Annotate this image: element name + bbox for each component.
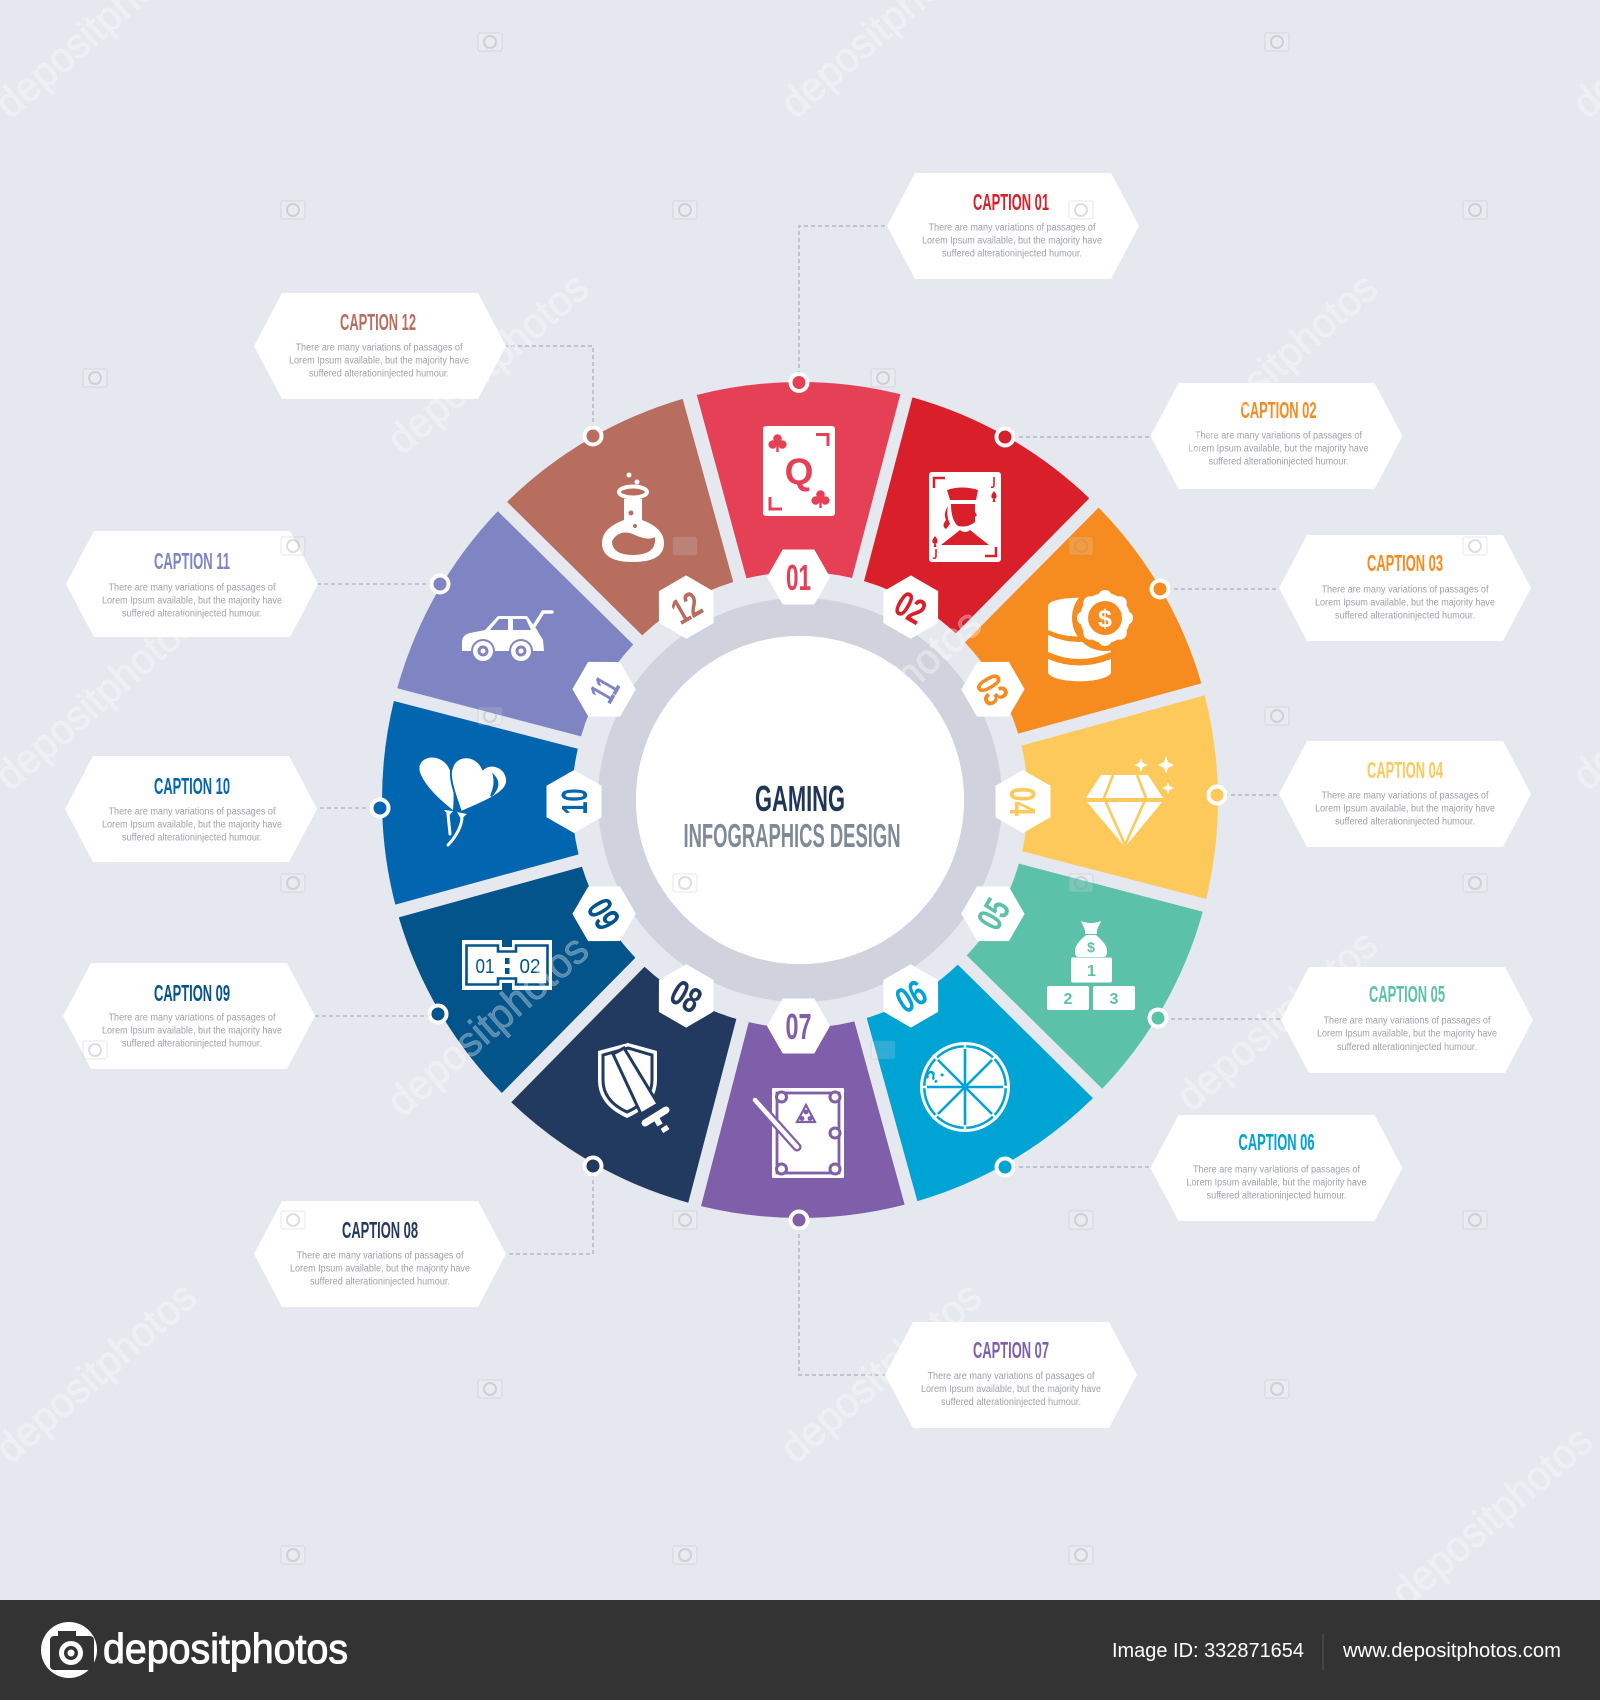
caption 10: CAPTION 10	[154, 773, 230, 799]
caption 11: suffered alterationinjected humour.	[122, 608, 262, 620]
watermark overlay: depositphotos	[771, 599, 990, 799]
caption 06: CAPTION 06	[1238, 1129, 1314, 1155]
icon: queen of clubs card: Q	[785, 451, 813, 492]
icon: wheel of fortune	[920, 1042, 1010, 1132]
caption 11: CAPTION 11	[154, 548, 230, 574]
caption 03: Lorem Ipsum available, but the majority have	[1315, 598, 1495, 608]
icon: heart balloons	[419, 757, 507, 845]
number hexagons: 03	[967, 667, 1017, 712]
footer bar	[0, 1600, 1600, 1700]
caption 07: CAPTION 07	[973, 1337, 1049, 1363]
icon: wheel of fortune: ?.	[922, 1063, 949, 1090]
caption 04: suffered alterationinjected humour.	[1335, 816, 1475, 828]
caption 10: There are many variations of passages of	[108, 806, 276, 818]
caption 12: CAPTION 12	[340, 309, 416, 335]
icon: shield and sword	[598, 1043, 668, 1131]
title: INFOGRAPHICS DESIGN	[684, 817, 900, 854]
caption 05: suffered alterationinjected humour.	[1337, 1042, 1477, 1053]
icon: pool table	[755, 1088, 844, 1178]
caption 02: Lorem Ipsum available, but the majority have	[1188, 444, 1369, 454]
caption 04: CAPTION 04	[1367, 757, 1443, 783]
caption 08: Lorem Ipsum available, but the majority have	[290, 1264, 470, 1274]
caption 04	[1279, 741, 1531, 847]
icon: depositphotos logo	[41, 1622, 97, 1678]
icon: database with dollar badge: $	[1098, 605, 1112, 633]
number hexagons: 09	[579, 891, 629, 937]
caption 11: There are many variations of passages of	[108, 582, 276, 594]
number hexagons: 05	[968, 891, 1018, 937]
caption 07: There are many variations of passages of	[928, 1371, 1095, 1382]
caption 12	[254, 293, 506, 399]
caption 08: CAPTION 08	[342, 1217, 418, 1243]
icon: money bag on podium: 1	[1087, 963, 1096, 980]
number hexagons: 12	[664, 583, 709, 632]
icon: diamond	[1086, 756, 1174, 847]
caption 06	[1150, 1115, 1402, 1221]
caption 05: Lorem Ipsum available, but the majority have	[1317, 1028, 1497, 1040]
icon: money bag on podium: 2	[1064, 991, 1073, 1008]
title: GAMING	[755, 778, 845, 819]
watermark overlay: depositphotos	[1167, 263, 1386, 463]
caption 12: suffered alterationinjected humour.	[309, 368, 449, 380]
caption 09	[63, 963, 315, 1069]
caption 04: Lorem Ipsum available, but the majority have	[1315, 804, 1495, 814]
connector dots	[372, 374, 1226, 1228]
caption 07: Lorem Ipsum available, but the majority have	[921, 1384, 1101, 1395]
caption 09: Lorem Ipsum available, but the majority have	[102, 1026, 282, 1036]
caption 08: There are many variations of passages of	[296, 1250, 464, 1262]
caption 12: There are many variations of passages of	[296, 342, 463, 354]
caption 03: CAPTION 03	[1367, 550, 1443, 576]
number hexagons: 11	[581, 670, 628, 709]
number hexagons: 04	[1002, 787, 1043, 816]
icon: scoreboard	[462, 940, 552, 990]
caption 01: There are many variations of passages of	[928, 222, 1096, 234]
caption 10	[65, 756, 317, 862]
caption 02: There are many variations of passages of	[1195, 430, 1362, 442]
caption 06: suffered alterationinjected humour.	[1206, 1190, 1346, 1202]
caption 07	[885, 1322, 1137, 1428]
icon: chemistry flask	[602, 472, 664, 562]
caption 11: Lorem Ipsum available, but the majority have	[102, 596, 282, 606]
footer logo text: depositphotos	[103, 1625, 348, 1672]
watermark overlay: depositphotos	[378, 263, 597, 463]
title	[684, 778, 900, 854]
caption 10: suffered alterationinjected humour.	[122, 832, 262, 844]
icon: scoreboard: 01	[476, 956, 494, 978]
caption 03: There are many variations of passages of	[1322, 584, 1489, 596]
caption 03	[1279, 535, 1531, 641]
number hexagons: 07	[786, 1006, 812, 1047]
caption 12: Lorem Ipsum available, but the majority have	[289, 356, 469, 366]
caption 05	[1281, 967, 1533, 1073]
icon: database with dollar badge	[1048, 585, 1138, 681]
number hexagons: 02	[888, 583, 933, 633]
number hexagons: 10	[554, 788, 595, 814]
footer image id: Image ID: 332871654	[1112, 1640, 1304, 1662]
caption 06: Lorem Ipsum available, but the majority have	[1186, 1178, 1367, 1188]
watermark overlay: depositphotos	[378, 925, 597, 1125]
number hexagons: 06	[888, 971, 934, 1021]
footer url: www.depositphotos.com	[1342, 1640, 1561, 1662]
number hexagons	[546, 550, 1050, 1054]
caption 05: There are many variations of passages of	[1324, 1016, 1491, 1026]
icon: queen of clubs card	[763, 426, 835, 516]
number hexagons: 08	[663, 971, 709, 1021]
icon: car with open trunk	[462, 612, 552, 663]
caption 09: CAPTION 09	[154, 980, 230, 1006]
caption 09: suffered alterationinjected humour.	[122, 1038, 262, 1050]
caption 03: suffered alterationinjected humour.	[1335, 610, 1475, 622]
caption 06: There are many variations of passages of	[1193, 1164, 1360, 1176]
caption 01: suffered alterationinjected humour.	[942, 248, 1082, 260]
icon: money bag on podium: 3	[1110, 991, 1119, 1008]
caption 01: Lorem Ipsum available, but the majority have	[922, 236, 1102, 246]
caption 10: Lorem Ipsum available, but the majority have	[102, 820, 282, 830]
caption 09: There are many variations of passages of	[108, 1012, 276, 1024]
caption 07: suffered alterationinjected humour.	[941, 1397, 1081, 1408]
wheel segments	[381, 382, 1219, 1219]
caption 02: CAPTION 02	[1240, 397, 1316, 423]
caption 01	[887, 173, 1139, 279]
icon: money bag on podium	[1047, 921, 1135, 1010]
caption 01: CAPTION 01	[973, 189, 1049, 215]
icon: scoreboard: 02	[520, 956, 540, 978]
icon: jack card	[929, 472, 1001, 562]
caption 02: suffered alterationinjected humour.	[1208, 456, 1348, 468]
number hexagons: 01	[786, 557, 811, 598]
connectors	[315, 226, 1281, 1375]
caption 08: suffered alterationinjected humour.	[310, 1276, 450, 1288]
watermark overlay: depositphotos	[771, 1272, 990, 1472]
caption 11	[66, 531, 318, 637]
watermark overlay: depositphotos	[1167, 920, 1386, 1120]
caption 05: CAPTION 05	[1369, 981, 1445, 1007]
caption 02	[1150, 383, 1402, 489]
wheel: ring and centre circle	[617, 617, 983, 983]
icon: money bag on podium: $	[1087, 939, 1095, 955]
caption 08	[254, 1201, 506, 1307]
caption 04: There are many variations of passages of	[1322, 790, 1489, 802]
